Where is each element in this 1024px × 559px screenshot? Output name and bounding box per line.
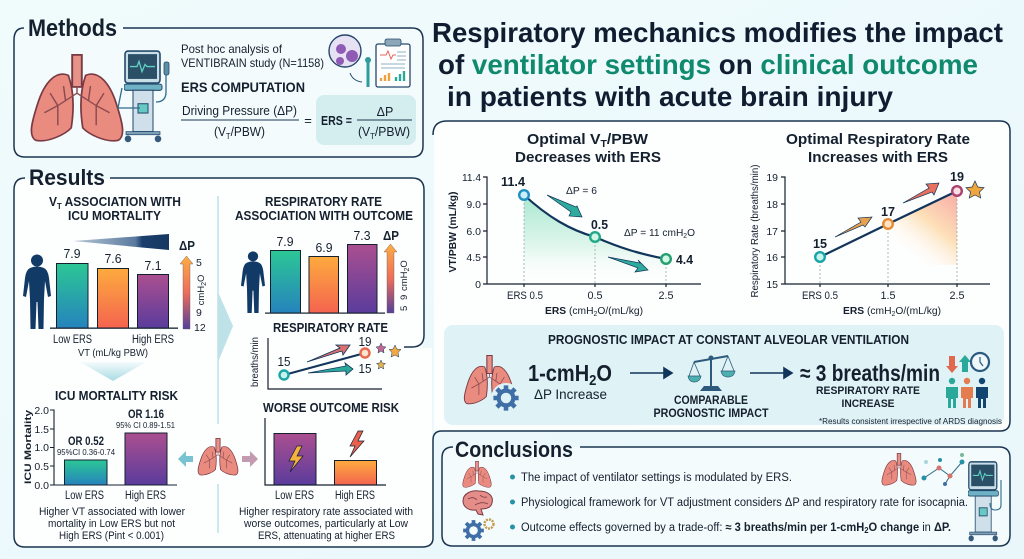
- formula: driving pressure fraction: [181, 104, 312, 141]
- bullet: trade-off: O change: [869, 522, 919, 534]
- formula: driving pressure fraction: T: [226, 132, 231, 141]
- heading: ERS computation: ERS COMPUTATION: [181, 79, 305, 95]
- icon: arrows, clock and people: [946, 353, 989, 408]
- icon: balance scale: [688, 356, 735, 391]
- bar chart: ICU mortality risk: 1.5: [34, 424, 49, 436]
- text: breaths per minute: ≈ 3 breaths/min: [800, 360, 940, 386]
- chart: optimal respiratory rate: 2.5: [950, 290, 964, 302]
- title: in patients with acute brain injury: [447, 81, 893, 112]
- formula: driving pressure fraction: Driving Pressure (ΔP): [182, 104, 297, 118]
- bullet: ventilator settings: The impact of ventilator settings is modulated by ERS.: [521, 472, 792, 484]
- legend: driving pressure scale: 2: [201, 282, 208, 286]
- text: comparable prognostic impact: COMPARABLE: [674, 395, 748, 407]
- chevron: down to risk chart: [80, 362, 146, 381]
- chart: optimal respiratory rate: 15: [766, 279, 778, 291]
- bar chart: ICU mortality risk: OR 1.16: [128, 407, 164, 421]
- chart: optimal VT/PBW: ERS 0.5: [507, 290, 543, 302]
- text: driving pressure increase: 2: [589, 372, 596, 389]
- heading: optimal respiratory rate: Optimal Respiratory Rate: [786, 131, 970, 148]
- bar chart: ICU mortality risk: 95%CI 0.36-0.74: [57, 447, 115, 457]
- arrow: to scale: [630, 368, 672, 378]
- bar chart: respiratory rate by ERS: 7.9: [276, 234, 294, 249]
- icon: network: [922, 453, 964, 486]
- bar chart: VT by ERS: High ERS: [132, 334, 174, 346]
- bar chart: ICU mortality risk: 0.5: [34, 461, 49, 473]
- bar chart: ICU mortality risk: ICU Mortality: [23, 409, 34, 484]
- legend: driving pressure scale: ΔP: [383, 229, 399, 243]
- text: study description: VENTIBRAIN study (N=1158): [181, 56, 324, 70]
- chart: optimal VT/PBW: ΔP = 6: [566, 185, 597, 197]
- heading: VT association: ICU MORTALITY: [68, 209, 162, 223]
- heading: respiratory rate: RESPIRATORY RATE: [273, 321, 388, 335]
- text: ICU mortality finding: Higher VT associated with lower: [39, 506, 185, 518]
- icon: brain: [463, 491, 492, 515]
- bar chart: VT by ERS: VT (mL/kg PBW): [78, 347, 148, 359]
- bar chart: VT by ERS: [50, 246, 178, 359]
- text: ICU mortality finding: mortality in Low ERS but not: [48, 518, 175, 530]
- formula: ERS box: ΔP: [377, 105, 393, 119]
- text: breaths per minute: RESPIRATORY RATE: [816, 385, 920, 397]
- legend: driving pressure scale: 12: [194, 322, 206, 334]
- text: driving pressure increase: [528, 360, 612, 402]
- text: breaths per minute: INCREASE: [842, 398, 894, 410]
- heading: optimal respiratory rate: [786, 131, 970, 166]
- chart: optimal VT/PBW: 2.5: [658, 290, 674, 302]
- chart: optimal VT/PBW: 2: [683, 233, 687, 240]
- text: ICU mortality finding: High ERS (Pint < 0.001): [59, 530, 164, 542]
- panel: conclusions: [442, 437, 1010, 546]
- heading: ICU mortality risk: ICU MORTALITY RISK: [55, 389, 178, 403]
- panel: prognostic impact: [444, 325, 1004, 426]
- chart: optimal VT/PBW: 4.5: [466, 252, 481, 264]
- chart: optimal respiratory rate: 17: [881, 205, 895, 219]
- heading: VT association: T: [57, 202, 62, 211]
- text: comparable prognostic impact: PROGNOSTIC IMPACT: [654, 408, 768, 420]
- chart: optimal VT/PBW: O/(mL/kg): [597, 305, 643, 317]
- bar chart: respiratory rate by ERS: 7.3: [354, 228, 370, 243]
- text: study description: [181, 42, 324, 70]
- chart: optimal VT/PBW: 4.4: [676, 253, 693, 267]
- heading: VT association: [49, 195, 181, 223]
- chart: optimal VT/PBW: O: [687, 227, 695, 239]
- text: comparable prognostic impact: [654, 395, 768, 420]
- bar chart: ICU mortality risk: Low ERS: [65, 490, 104, 502]
- legend: driving pressure scale: 2: [404, 267, 411, 271]
- heading: optimal VT: Optimal V: [527, 131, 597, 148]
- bar chart: VT by ERS: 7.9: [64, 246, 80, 261]
- bar chart: VT by ERS: Low ERS: [53, 334, 92, 346]
- panel: methods: [14, 15, 423, 157]
- text: outcome finding: Higher respiratory rate associated with: [239, 506, 413, 518]
- icon: petri dish and pipette: [329, 35, 371, 87]
- bar chart: VT by ERS: 7.1: [144, 258, 162, 273]
- chart: optimal respiratory rate: 16: [766, 252, 778, 264]
- heading: worse outcome risk: WORSE OUTCOME RISK: [263, 401, 399, 415]
- bullet: physiological framework: Physiological framework for VT adjustment considers ΔP and respiratory rate for isocapnia.: [521, 497, 968, 509]
- heading: optimal VT: T: [600, 139, 607, 150]
- chart: optimal VT/PBW: 9.0: [466, 199, 481, 211]
- line chart: respiratory rate: 15: [358, 362, 372, 376]
- legend: driving pressure scale: 5: [196, 257, 202, 269]
- formula: ERS box: (V: [358, 125, 370, 139]
- legend: driving pressure scale: O: [399, 260, 410, 268]
- heading: respiratory rate association: ASSOCIATION WITH OUTCOME: [235, 209, 413, 223]
- title: of ventilator settings on clinical outcome: [438, 49, 978, 80]
- heading: optimal VT: Decreases with ERS: [515, 149, 661, 166]
- text: driving pressure increase: ΔP Increase: [534, 387, 607, 402]
- bar chart: ICU mortality risk: 2.0: [34, 405, 49, 417]
- formula: ERS box: [316, 95, 416, 145]
- line chart: respiratory rate: 15: [278, 355, 291, 369]
- bar chart: ICU mortality risk: 0.0: [34, 480, 49, 492]
- bar chart: worse outcome risk: High ERS: [335, 490, 375, 502]
- legend: driving pressure scale: cmH: [399, 271, 410, 291]
- connector from rate chart to right panel: [404, 190, 424, 347]
- heading: respiratory rate association: RESPIRATORY RATE: [265, 195, 382, 209]
- line chart: respiratory rate: [250, 335, 401, 389]
- chart: optimal VT/PBW: 11.4: [501, 175, 525, 189]
- formula: driving pressure fraction: =: [304, 113, 312, 128]
- heading: results: Results: [29, 165, 105, 190]
- bar chart: ICU mortality risk: 95% CI 0.89-1.51: [116, 420, 175, 430]
- chart: optimal VT/PBW: 11.4: [462, 172, 481, 184]
- icon: person: [241, 251, 265, 313]
- chart: optimal respiratory rate: O/(mL/kg): [895, 305, 941, 317]
- chart: optimal respiratory rate: 2: [892, 311, 895, 318]
- legend: driving pressure scale: 9: [399, 295, 410, 300]
- icon: lungs, small: [882, 453, 916, 485]
- bar chart: ICU mortality risk: 1.0: [34, 442, 49, 454]
- icon: lungs with gear: [464, 356, 521, 413]
- formula: ERS box: T: [370, 132, 375, 141]
- bar chart: respiratory rate by ERS: 6.9: [316, 240, 332, 255]
- chart: optimal respiratory rate: 1.5: [880, 290, 896, 302]
- panel: results: [14, 121, 1010, 547]
- icon: ventilator, small: [968, 462, 1001, 541]
- chart: optimal VT/PBW: ΔP = 11 cmH: [624, 227, 685, 239]
- heading: optimal respiratory rate: Increases with ERS: [808, 149, 948, 166]
- bar chart: ICU mortality risk: High ERS: [125, 490, 166, 502]
- bar chart: VT by ERS: 7.6: [104, 251, 122, 266]
- bullet: trade-off: Outcome effects governed by a trade-off: ≈ 3 breaths/min per 1-cmH: [521, 522, 869, 534]
- chart: optimal VT/PBW: ERS (cmH: [545, 305, 594, 317]
- wedge: tidal volume increase: [73, 234, 169, 250]
- arrow: to mortality risk: [178, 451, 193, 467]
- heading: respiratory rate association: [235, 195, 413, 223]
- divider and chevron between columns: [218, 196, 233, 533]
- icon: lungs: [463, 461, 491, 487]
- bar chart: worse outcome risk: Low ERS: [275, 490, 314, 502]
- legend: driving pressure scale: cmH: [196, 286, 207, 305]
- chart: optimal respiratory rate: 17: [766, 226, 778, 238]
- icon: ventilator: [118, 51, 169, 142]
- chart: optimal respiratory rate: ERS (cmH: [843, 305, 892, 317]
- chart: optimal VT/PBW: 0: [475, 279, 481, 291]
- arrow: to breaths: [750, 368, 792, 378]
- chart: optimal VT/PBW: 0.5: [588, 290, 602, 302]
- heading: optimal VT: /PBW: [607, 131, 649, 148]
- legend: driving pressure scale: 5: [399, 306, 410, 311]
- chart: optimal VT/PBW: 0.5: [591, 218, 608, 232]
- chart: optimal VT/PBW: VT/PBW (mL/kg): [448, 192, 459, 272]
- heading: VT association: ASSOCIATION WITH: [62, 195, 181, 209]
- icon: lungs: [31, 55, 123, 141]
- line chart: respiratory rate: breaths/min: [250, 337, 261, 387]
- heading: prognostic impact: PROGNOSTIC IMPACT AT CONSTANT ALVEOLAR VENTILATION: [548, 333, 909, 347]
- chart: optimal respiratory rate: 15: [813, 237, 827, 251]
- chart: optimal VT/PBW: [448, 131, 701, 318]
- bullet: trade-off: in ΔP.: [922, 522, 952, 534]
- chart: optimal respiratory rate: 19: [950, 170, 964, 184]
- formula: ERS box: /PBW): [375, 125, 410, 139]
- text: breaths per minute: [800, 360, 940, 410]
- line chart: respiratory rate: 19: [358, 335, 372, 349]
- heading: conclusions: Conclusions: [455, 437, 573, 462]
- chart: optimal VT/PBW: 6.0: [466, 226, 481, 238]
- legend: driving pressure scale: [179, 239, 208, 334]
- bar chart: respiratory rate by ERS: [265, 228, 385, 314]
- heading: VT association: V: [49, 195, 57, 209]
- text: outcome finding: ERS, attenuating at higher ERS: [258, 530, 395, 542]
- text: ICU mortality finding: [39, 506, 185, 542]
- formula: ERS box: ERS =: [321, 114, 352, 128]
- footnote: *Results consistent irrespective of ARDS diagnosis: [819, 417, 1002, 426]
- bar chart: ICU mortality risk: OR 0.52: [68, 434, 104, 448]
- chart: optimal respiratory rate: ERS 0.5: [802, 290, 838, 302]
- arrow: to outcome risk: [242, 451, 258, 467]
- chart: optimal respiratory rate: 18: [766, 199, 778, 211]
- icon: person: [23, 254, 51, 329]
- chart: optimal respiratory rate: [750, 131, 990, 318]
- legend: driving pressure scale: 9: [196, 307, 202, 319]
- title: Respiratory mechanics modifies the impact: [432, 17, 1003, 48]
- text: driving pressure increase: O: [596, 360, 612, 386]
- bar chart: ICU mortality risk: [23, 405, 177, 502]
- chart: optimal respiratory rate: Respiratory Rate (breaths/min): [750, 164, 761, 298]
- title: [432, 17, 1003, 112]
- bar chart: worse outcome risk: [265, 418, 386, 502]
- icon: central lungs: [198, 438, 238, 475]
- text: outcome finding: worse outcomes, particularly at Low: [243, 518, 408, 530]
- legend: driving pressure scale: [383, 229, 411, 313]
- heading: optimal VT: [515, 131, 661, 166]
- text: outcome finding: [239, 506, 413, 542]
- icon: gears: [463, 520, 494, 541]
- formula: driving pressure fraction: (V: [214, 125, 226, 139]
- bullet: trade-off: 2: [864, 526, 869, 535]
- icon: clipboard: [376, 39, 410, 87]
- text: study description: Post hoc analysis of: [181, 42, 283, 56]
- heading: methods: Methods: [28, 15, 117, 42]
- legend: driving pressure scale: O: [196, 275, 207, 282]
- legend: driving pressure scale: ΔP: [179, 239, 195, 253]
- chart: optimal respiratory rate: 19: [766, 172, 778, 184]
- chart: optimal VT/PBW: 2: [594, 311, 597, 318]
- text: driving pressure increase: 1-cmH: [528, 360, 598, 386]
- formula: driving pressure fraction: /PBW): [231, 125, 265, 139]
